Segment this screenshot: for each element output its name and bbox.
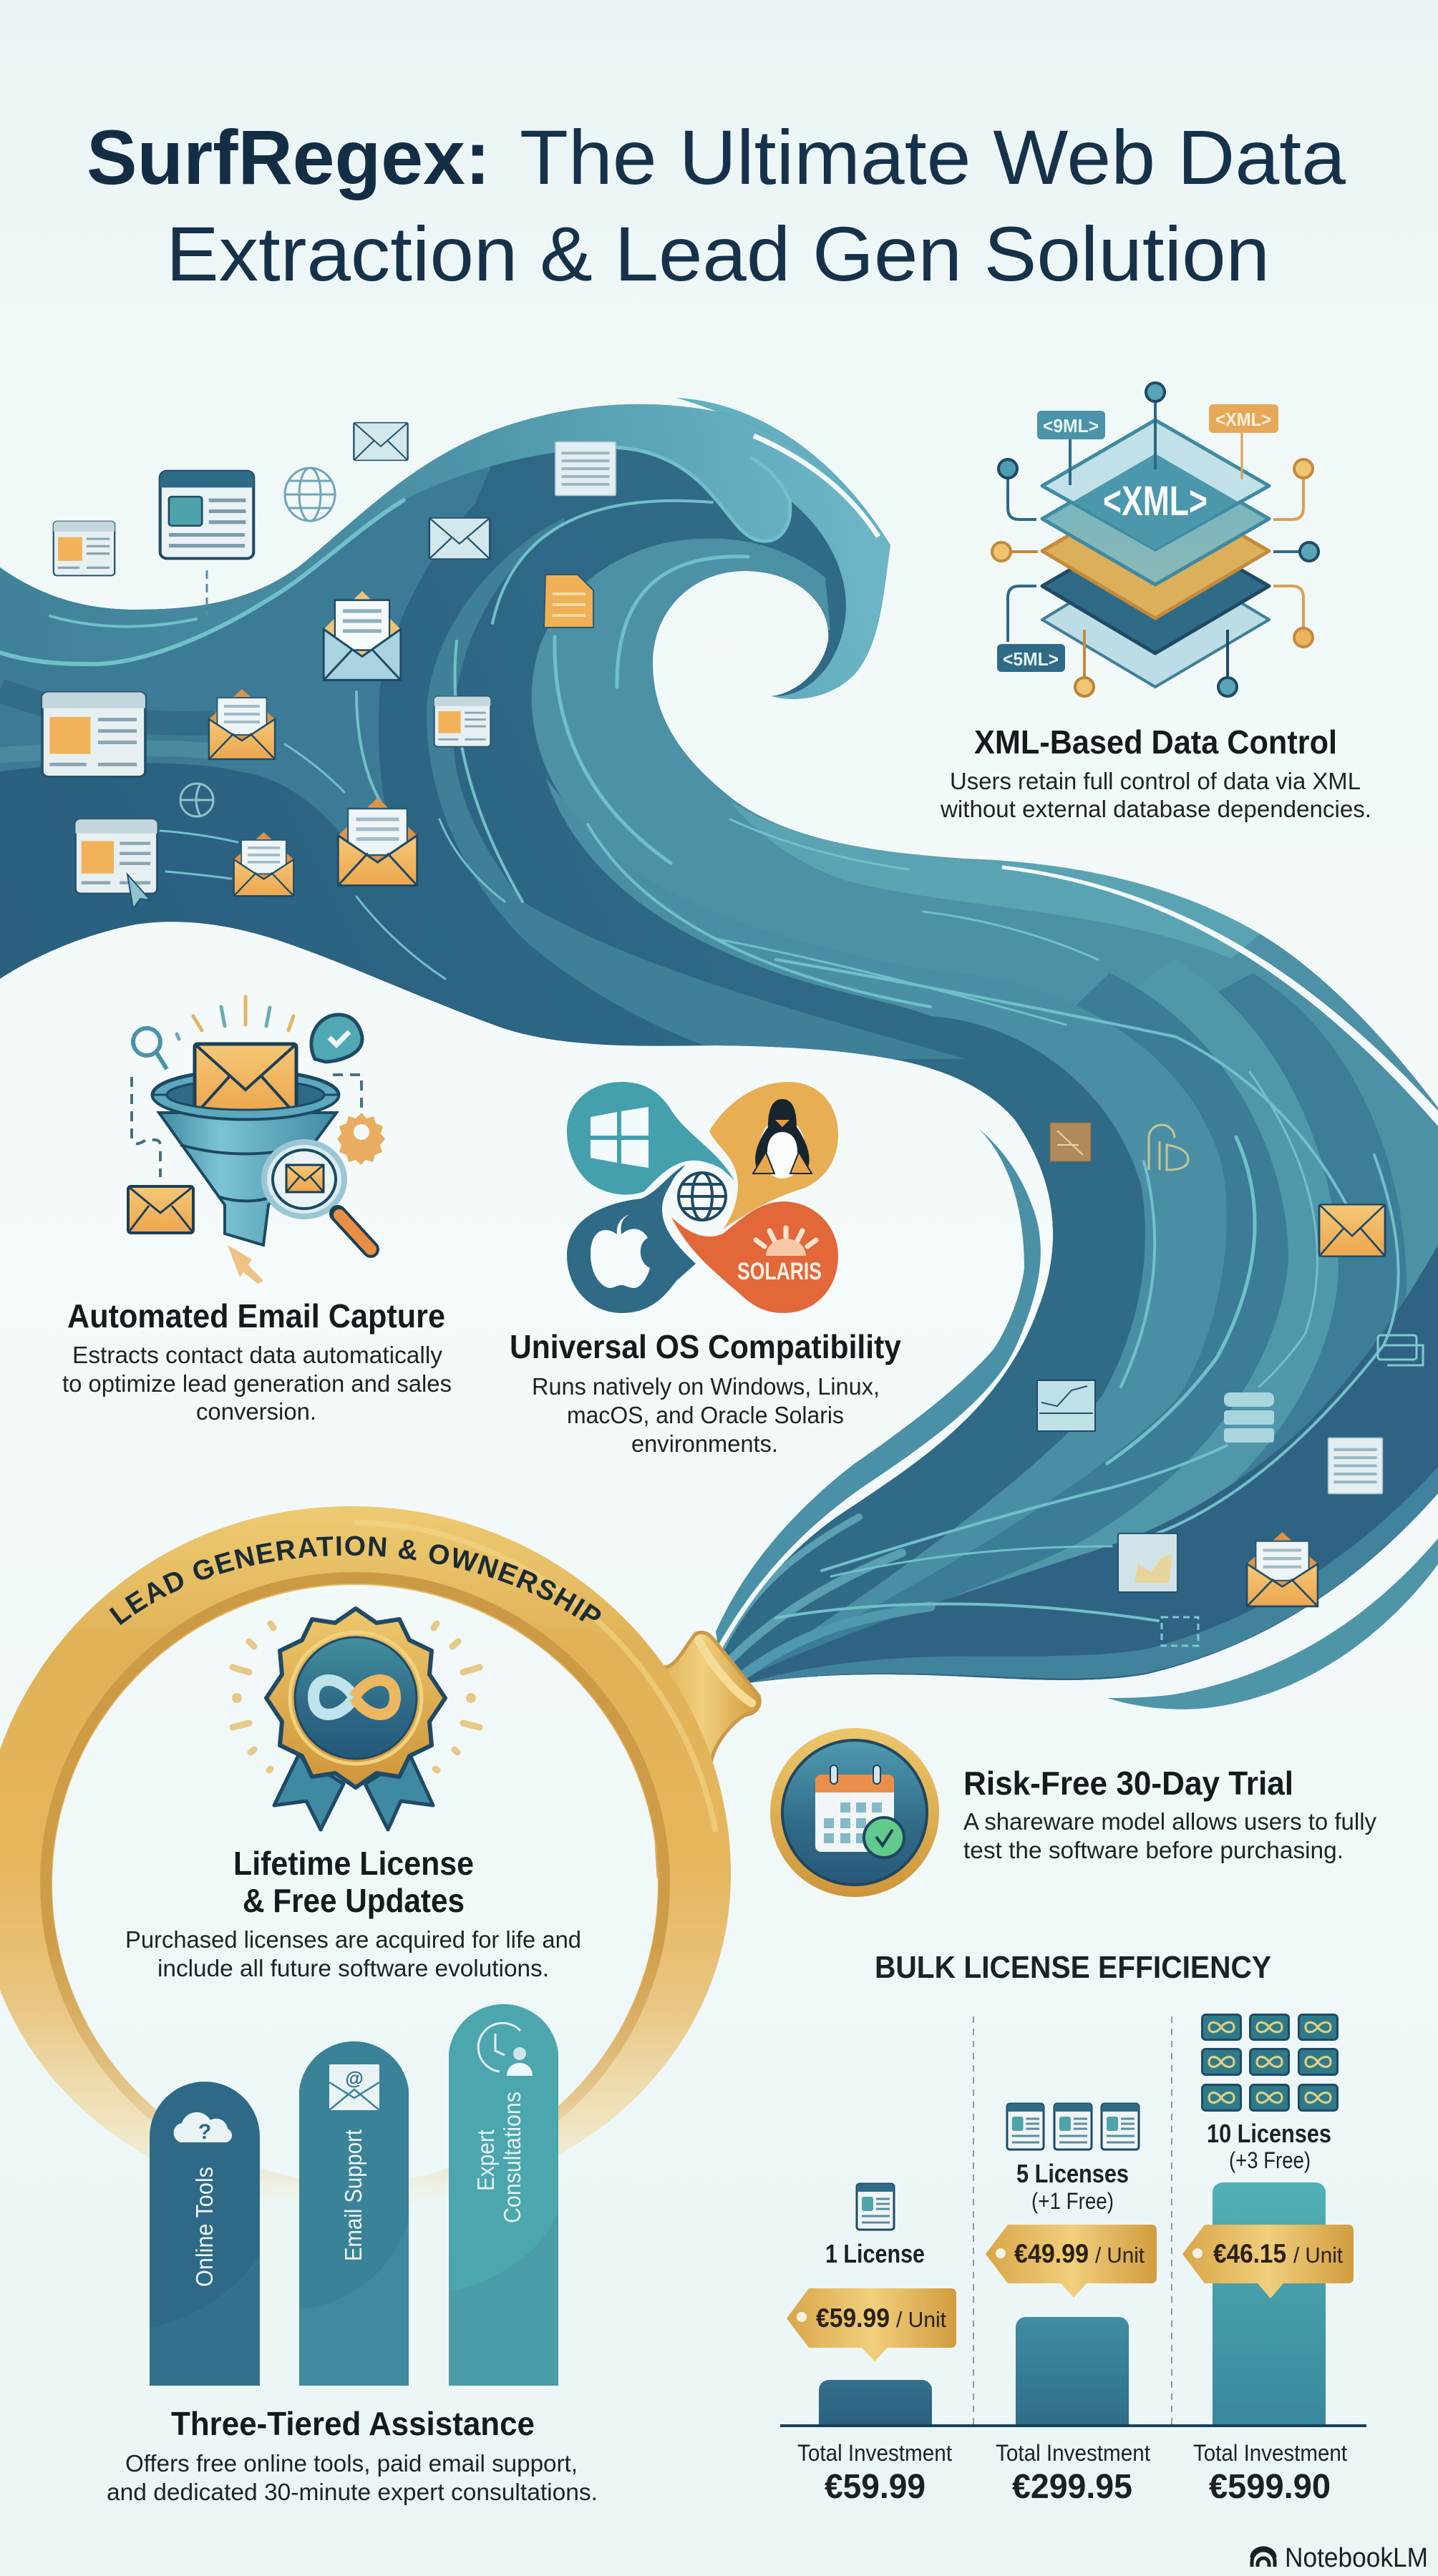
pillar: expert consultations: Consultations [499,2092,525,2223]
text block: lifetime license: & Free Updates [243,1882,465,1919]
column: 1 license: €59.99 [816,2303,890,2333]
text block: automated email capture: to optimize lead generation and sales [62,1370,452,1397]
gold magnifier ring with neck [0,1506,759,2207]
pillar: email support: Email Support [340,2129,366,2261]
XML-based data control icon: stacked layers [992,383,1318,696]
column: 5 licenses: €49.99 [1014,2239,1089,2268]
text block: universal OS compatibility: Runs natively on Windows, Linux, [532,1373,880,1400]
text block: risk-free trial: test the software before purchasing. [963,1837,1344,1863]
pillar: email support: @ [345,2067,364,2089]
text block: XML-based data control [940,723,1371,822]
column: 10 licenses: €599.90 [1209,2468,1331,2506]
text block: three-tiered assistance: Three-Tiered Assistance [171,2405,535,2442]
column: 10 licenses [1182,2015,1354,2506]
pillar: online tools [150,2082,260,2386]
column: 10 licenses: (+3 Free) [1229,2147,1311,2173]
XML-based data control icon: stacked layers: <XML> [1215,409,1271,430]
column: 5 licenses: Total Investment [996,2440,1150,2466]
text block: automated email capture: Estracts contact data automatically [72,1342,443,1368]
XML-based data control icon: stacked layers: <5ML> [1003,648,1059,670]
text block: three-tiered assistance: Offers free online tools, paid email support, [125,2450,578,2477]
title [87,114,1346,297]
title: The Ultimate Web Data [520,114,1346,200]
text block: risk-free trial [963,1765,1376,1863]
column: 5 licenses: €299.95 [1012,2468,1132,2506]
column: 1 license: / Unit [896,2307,946,2332]
text block: universal OS compatibility: Universal OS Compatibility [510,1328,901,1365]
pillar: online tools: ? [198,2120,211,2144]
text block: three-tiered assistance [107,2405,598,2505]
column: 1 license: Total Investment [797,2440,952,2466]
text block: universal OS compatibility: macOS, and Oracle Solaris [567,1402,844,1428]
title: Extraction & Lead Gen Solution [166,210,1270,297]
bar chart: bulk license pricing [780,2015,1366,2506]
column: 1 license [787,2184,956,2506]
column: 10 licenses: 10 Licenses [1207,2119,1331,2148]
pillar: online tools: Online Tools [191,2167,218,2287]
text block: lifetime license [125,1845,581,1981]
text block: automated email capture: Automated Email Capture [67,1297,445,1335]
text block: automated email capture [62,1297,452,1425]
pillar: expert consultations [449,2004,558,2386]
text block: XML-based data control: without external database dependencies. [940,796,1371,822]
column: 5 licenses: (+1 Free) [1031,2188,1114,2214]
text block: lifetime license: Lifetime License [233,1845,474,1882]
icon: OS compatibility clover [567,1082,838,1313]
wave: flowing data stream [0,358,1438,1753]
column: 5 licenses: 5 Licenses [1016,2159,1129,2188]
XML-based data control icon: stacked layers: <9ML> [1043,415,1099,436]
text block: lifetime license: Purchased licenses are acquired for life and [125,1926,581,1953]
icons carried on the wave [42,423,1423,1646]
pillar: expert consultations: Expert [472,2129,499,2191]
title: SurfRegex: [87,114,490,200]
NotebookLM logo: NotebookLM [1285,2543,1428,2573]
chart heading: bulk license efficiency: BULK LICENSE EFFICIENCY [875,1950,1271,1985]
text block: risk-free trial: Risk-Free 30-Day Trial [963,1765,1293,1802]
text block: automated email capture: conversion. [196,1398,316,1425]
column: 10 licenses: €46.15 [1213,2239,1286,2268]
text block: universal OS compatibility [510,1328,901,1457]
icon: trial calendar badge [770,1728,939,1897]
column: 10 licenses: Total Investment [1193,2440,1347,2466]
icon: email funnel [128,997,385,1284]
column: 5 licenses: / Unit [1095,2243,1145,2268]
icon: lifetime license medal [232,1609,480,1830]
text block: universal OS compatibility: environments. [631,1430,778,1457]
column: 5 licenses [986,2104,1157,2506]
column: 10 licenses: / Unit [1293,2243,1343,2268]
text block: XML-based data control: Users retain full control of data via XML [950,768,1361,794]
text block: three-tiered assistance: and dedicated 30-minute expert consultations. [107,2479,598,2505]
column: 1 license: €59.99 [825,2468,926,2506]
column: 1 license: 1 License [825,2239,925,2268]
ring label: lead generation and ownership: LEAD GENERATION & OWNERSHIP [109,1536,601,1626]
text block: risk-free trial: A shareware model allows users to fully [963,1808,1376,1835]
icon: OS compatibility clover: SOLARIS [737,1258,822,1285]
pillar: email support [299,2041,409,2386]
text block: lifetime license: include all future software evolutions. [157,1955,549,1981]
XML-based data control icon: stacked layers: <XML> [1103,478,1208,525]
text block: XML-based data control: XML-Based Data Control [974,723,1337,761]
